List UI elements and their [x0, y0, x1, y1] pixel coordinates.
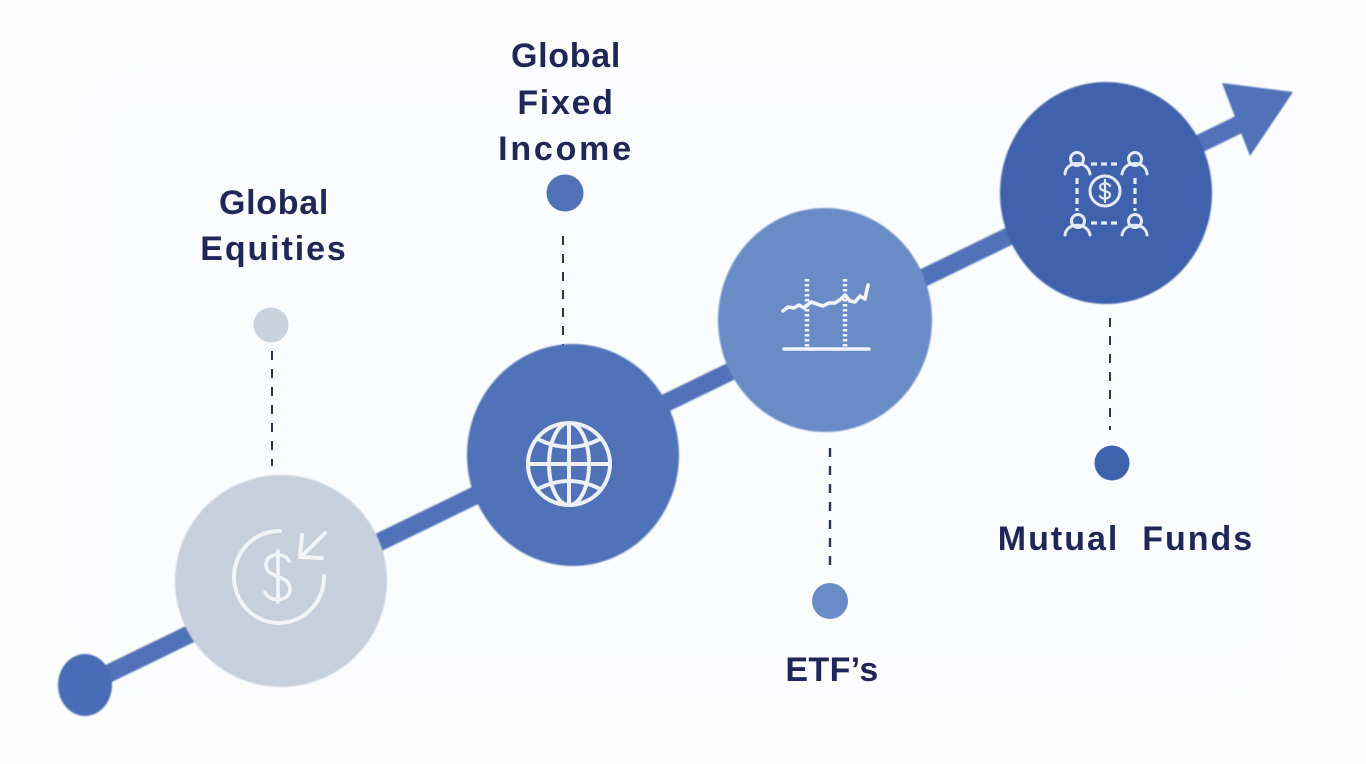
marker dot — [254, 308, 288, 342]
start dot — [58, 654, 112, 716]
icon: network of people around dollar — [1065, 152, 1147, 235]
circle node — [1000, 82, 1212, 304]
marker dot — [812, 583, 848, 619]
circle node — [718, 208, 932, 432]
icon: globe — [528, 423, 610, 505]
step 1: Global Equities — [175, 184, 387, 687]
circle node — [467, 344, 679, 566]
heading: ETF's: ETF’s — [785, 651, 879, 689]
icon: market chart — [783, 279, 869, 349]
dashed connector — [829, 448, 831, 566]
heading: Global Equities: Equities — [200, 230, 348, 268]
step 4: Mutual Funds — [998, 82, 1254, 558]
arrow head — [1222, 83, 1293, 156]
marker dot — [1094, 446, 1130, 480]
heading: Global Fixed Income: Income — [498, 130, 634, 168]
heading: Mutual Funds: Mutual Funds — [998, 520, 1254, 558]
marker dot — [546, 174, 584, 212]
circle node — [175, 475, 387, 687]
growth arrow — [58, 83, 1293, 716]
icon: dollar with inward arrow — [234, 531, 325, 623]
heading: Global Fixed Income: Global — [511, 37, 621, 75]
dashed connector — [1109, 318, 1111, 430]
heading: Global Equities: Global — [219, 184, 329, 222]
step 2: Global Fixed Income — [467, 37, 679, 566]
heading: Global Fixed Income: Fixed — [517, 84, 615, 122]
dashed connector — [562, 236, 564, 346]
step 3: ETF's — [718, 208, 932, 689]
arrow shaft — [85, 124, 1240, 685]
dashed connector — [271, 351, 273, 466]
